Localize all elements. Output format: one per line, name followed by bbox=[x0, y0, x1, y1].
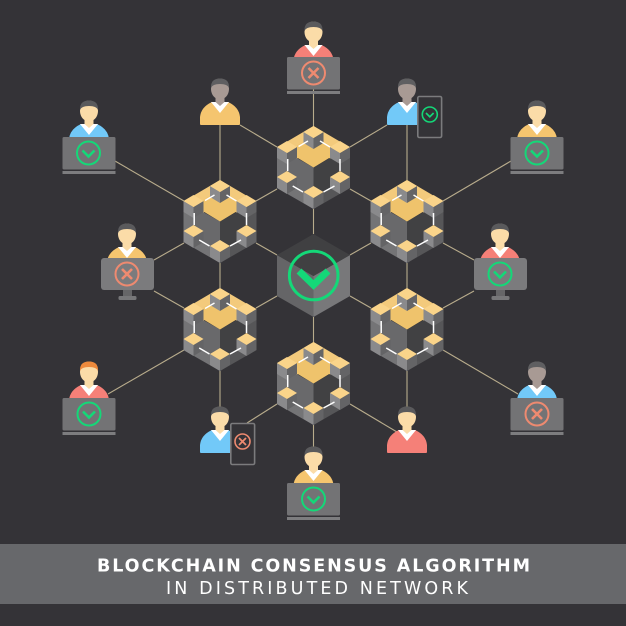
node: monitor middle left, rejected bbox=[101, 224, 154, 300]
node: top laptop, rejected bbox=[287, 22, 340, 94]
block cube: top bbox=[277, 126, 350, 209]
node: laptop upper far right, approved bbox=[510, 100, 564, 174]
block cube: upper right bbox=[370, 180, 444, 263]
node: person with phone, upper right, approved bbox=[387, 78, 442, 138]
network connection lines bbox=[108, 89, 518, 450]
title line 2: IN DISTRIBUTED NETWORK bbox=[166, 579, 469, 599]
block cube: upper left bbox=[184, 180, 256, 263]
block cube: lower left bbox=[184, 288, 256, 371]
title banner bbox=[0, 544, 626, 604]
node: laptop lower far right, rejected bbox=[510, 362, 564, 435]
central validated block bbox=[277, 234, 350, 317]
node: monitor middle right, approved bbox=[474, 224, 527, 300]
block cube: lower right bbox=[370, 288, 444, 371]
node: laptop lower far left, approved bbox=[62, 362, 116, 435]
node: bottom laptop, approved bbox=[287, 446, 340, 520]
node: person upper left bbox=[200, 78, 240, 125]
node: laptop upper far left, approved bbox=[62, 100, 116, 174]
node: person lower right bbox=[387, 406, 427, 453]
title line 1: BLOCKCHAIN CONSENSUS ALGORITHM bbox=[97, 556, 530, 576]
node: person with phone, lower left, rejected bbox=[200, 406, 255, 464]
block cube: bottom bbox=[277, 342, 350, 425]
